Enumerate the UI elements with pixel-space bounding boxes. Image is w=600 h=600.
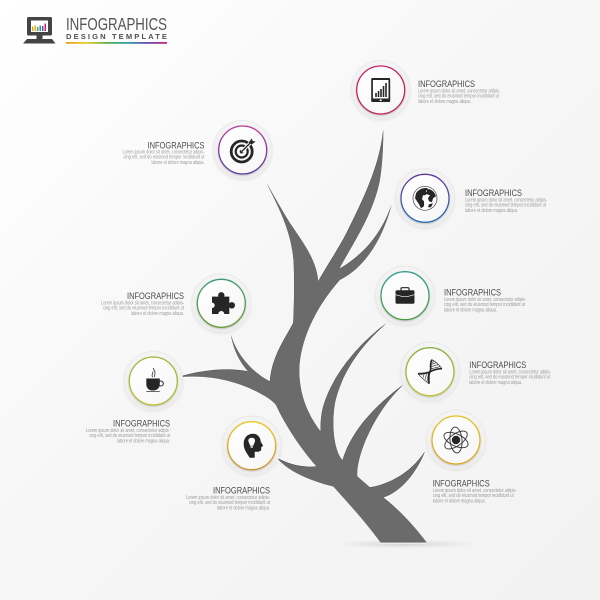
text: atom bbox=[433, 478, 517, 504]
text: head: Lorem ipsum dolor sit amet, consectetur adipis- bbox=[186, 495, 270, 501]
subtitle: DESIGN TEMPLATE bbox=[66, 32, 167, 41]
text: globe: INFOGRAPHICS bbox=[465, 188, 522, 199]
icon: globe bbox=[413, 186, 437, 210]
text: briefcase bbox=[444, 288, 526, 314]
text: atom: Lorem ipsum dolor sit amet, consectetur adipis- bbox=[433, 488, 517, 494]
text: head: labore et dolore magna aliqua. bbox=[217, 506, 270, 512]
text: atom: INFOGRAPHICS bbox=[433, 478, 490, 490]
text: atom: labore et dolore magna aliqua. bbox=[433, 498, 486, 504]
text: coffee: cing elit, sed do eiusmod tempor incididunt ut bbox=[89, 433, 170, 439]
tree shadow bbox=[333, 540, 477, 548]
text: tablet bbox=[418, 79, 500, 105]
node: tablet bbox=[351, 60, 410, 120]
text: dna: INFOGRAPHICS bbox=[469, 360, 526, 371]
text: target: labore et dolore magna aliqua. bbox=[152, 160, 204, 166]
text: dna: Lorem ipsum dolor sit amet, consectetur adipis- bbox=[469, 370, 552, 376]
icon: atom bbox=[442, 427, 470, 453]
text: coffee: INFOGRAPHICS bbox=[113, 418, 170, 430]
text: tablet: labore et dolore magna aliqua. bbox=[418, 99, 471, 105]
header logo bbox=[23, 14, 167, 44]
text: briefcase: Lorem ipsum dolor sit amet, consectetur adipis- bbox=[444, 297, 526, 303]
text: target: INFOGRAPHICS bbox=[148, 140, 204, 152]
node: dna bbox=[400, 342, 460, 401]
text: tablet: Lorem ipsum dolor sit amet, consectetur adipis- bbox=[418, 88, 500, 94]
text: dna: labore et dolore magna aliqua. bbox=[469, 380, 522, 386]
text: atom: cing elit, sed do eiusmod tempor incididunt ut bbox=[433, 493, 514, 499]
node: head with bulb bbox=[222, 416, 281, 475]
icon: monitor with chart bbox=[23, 17, 56, 44]
node: globe bbox=[396, 169, 454, 228]
rainbow rule bbox=[66, 42, 167, 44]
text: puzzle: labore et dolore magna aliqua. bbox=[131, 311, 184, 317]
icon: head with light bulb bbox=[244, 434, 263, 458]
text: target: cing elit, sed do eiusmod tempor incididunt ut bbox=[124, 155, 205, 161]
icon: coffee cup bbox=[146, 368, 163, 392]
text: puzzle: INFOGRAPHICS bbox=[127, 291, 184, 302]
icon: target with arrow bbox=[231, 138, 256, 162]
text: head: INFOGRAPHICS bbox=[213, 486, 270, 496]
node: puzzle bbox=[192, 274, 251, 333]
text: puzzle: cing elit, sed do eiusmod tempor incididunt ut bbox=[103, 306, 184, 312]
text: globe: labore et dolore magna aliqua. bbox=[465, 208, 518, 214]
text: puzzle bbox=[101, 291, 184, 317]
text: coffee bbox=[86, 418, 170, 444]
node: atom bbox=[426, 410, 486, 470]
icon: puzzle piece bbox=[209, 292, 235, 317]
title: INFOGRAPHICS bbox=[66, 14, 167, 34]
icon: briefcase bbox=[396, 288, 414, 304]
text: globe bbox=[465, 188, 547, 214]
node: target bbox=[213, 120, 272, 180]
node: coffee bbox=[124, 352, 183, 410]
tree bbox=[178, 130, 427, 543]
text: head bbox=[186, 486, 270, 512]
text: dna bbox=[469, 360, 552, 386]
node: briefcase bbox=[376, 266, 434, 325]
text: briefcase: cing elit, sed do eiusmod tempor incididunt ut bbox=[444, 302, 525, 308]
icon: tablet chart bbox=[371, 78, 390, 102]
icon: dna helix bbox=[418, 360, 442, 384]
text: puzzle: Lorem ipsum dolor sit amet, consectetur adipis- bbox=[101, 300, 184, 306]
text: briefcase: labore et dolore magna aliqua. bbox=[444, 308, 497, 314]
text: globe: Lorem ipsum dolor sit amet, consectetur adipis- bbox=[465, 198, 547, 204]
text: briefcase: INFOGRAPHICS bbox=[444, 288, 501, 298]
text: target: Lorem ipsum dolor sit amet, consectetur adipis- bbox=[122, 150, 205, 156]
text: dna: cing elit, sed do eiusmod tempor incididunt ut bbox=[469, 375, 551, 381]
text: coffee: labore et dolore magna aliqua. bbox=[117, 438, 170, 444]
text: tablet: INFOGRAPHICS bbox=[418, 79, 475, 90]
text: globe: cing elit, sed do eiusmod tempor incididunt ut bbox=[465, 203, 546, 209]
text: head: cing elit, sed do eiusmod tempor incididunt ut bbox=[189, 500, 270, 506]
text: target bbox=[122, 140, 205, 166]
text: coffee: Lorem ipsum dolor sit amet, consectetur adipis- bbox=[86, 428, 170, 434]
text: tablet: cing elit, sed do eiusmod tempor incididunt ut bbox=[418, 94, 499, 100]
